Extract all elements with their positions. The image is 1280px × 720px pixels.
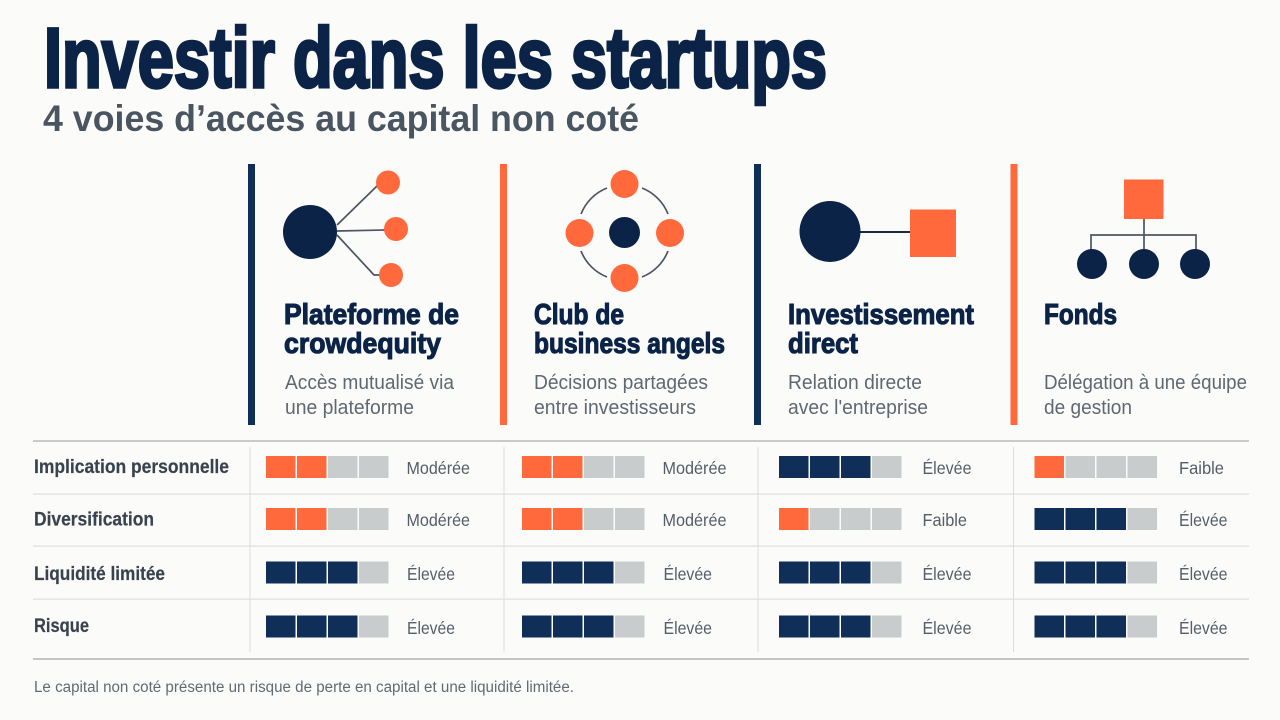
row: implication personnelle: Élevée <box>922 458 972 478</box>
description: investissement direct <box>788 372 928 419</box>
icon: circle of investors <box>566 170 684 292</box>
row: risque: Élevée <box>664 618 712 638</box>
heading: club de business angels: business angels <box>534 328 725 360</box>
icon: hub and three nodes <box>283 170 408 287</box>
description: club <box>534 372 708 419</box>
description: club: entre investisseurs <box>534 397 696 419</box>
description: plateforme: une plateforme <box>285 397 414 419</box>
row: risque <box>34 616 1228 638</box>
row: diversification: Diversification <box>34 510 154 530</box>
row: liquidité limitée <box>34 562 1228 585</box>
heading: investissement direct: Investissement <box>788 299 974 331</box>
panel: investissement direct <box>754 164 974 425</box>
heading: plateforme de crowdequity <box>284 299 459 360</box>
description: fonds: Délégation à une équipe <box>1044 372 1247 394</box>
description: plateforme <box>285 372 455 419</box>
row: implication personnelle: Modérée <box>406 458 470 478</box>
description: club: Décisions partagées <box>534 372 708 394</box>
row: diversification: Modérée <box>406 510 470 530</box>
row: risque: Risque <box>34 616 89 637</box>
row: implication personnelle: Faible <box>1179 458 1224 478</box>
heading: plateforme de crowdequity: Plateforme de <box>284 299 459 331</box>
row: liquidité limitée: Liquidité limitée <box>34 564 165 585</box>
row: diversification <box>34 508 1228 530</box>
row: risque: Élevée <box>1179 618 1228 638</box>
row: implication personnelle: Implication personnelle <box>34 457 229 478</box>
heading: club de business angels <box>534 299 725 360</box>
row: risque: Élevée <box>407 618 455 638</box>
row: diversification: Faible <box>922 510 967 530</box>
heading: investissement direct <box>788 299 974 360</box>
description: investissement direct: Relation directe <box>788 372 922 394</box>
description: plateforme: Accès mutualisé via <box>285 372 455 394</box>
description: fonds <box>1044 372 1247 419</box>
heading: investissement direct: direct <box>788 328 858 360</box>
icon: circle linked to square <box>800 201 956 262</box>
heading: plateforme de crowdequity: crowdequity <box>284 328 441 360</box>
row: diversification: Modérée <box>662 510 726 530</box>
panel: fonds <box>1010 164 1247 425</box>
heading: club de business angels: Club de <box>534 299 624 331</box>
footnote: Le capital non coté présente un risque de perte en capital et une liquidité limitée. <box>34 679 574 696</box>
panel: plateforme de crowdequity <box>248 164 459 425</box>
row: implication personnelle: Modérée <box>662 458 726 478</box>
row: liquidité limitée: Élevée <box>922 564 972 584</box>
comparison table <box>33 440 1249 660</box>
subtitle: 4 voies d’accès au capital non coté <box>43 98 639 139</box>
description: investissement direct: avec l'entreprise <box>788 397 928 419</box>
row: implication personnelle <box>34 456 1224 478</box>
row: liquidité limitée: Élevée <box>664 564 712 584</box>
row: diversification: Élevée <box>1179 510 1228 530</box>
heading: fonds: Fonds <box>1044 299 1117 331</box>
title: Investir dans les startups <box>44 11 827 105</box>
row: risque: Élevée <box>922 618 972 638</box>
description: fonds: de gestion <box>1044 397 1132 419</box>
row: liquidité limitée: Élevée <box>1179 564 1228 584</box>
row: liquidité limitée: Élevée <box>407 564 455 584</box>
panel: club de business angels <box>500 164 725 425</box>
icon: organisation tree <box>1077 180 1210 279</box>
